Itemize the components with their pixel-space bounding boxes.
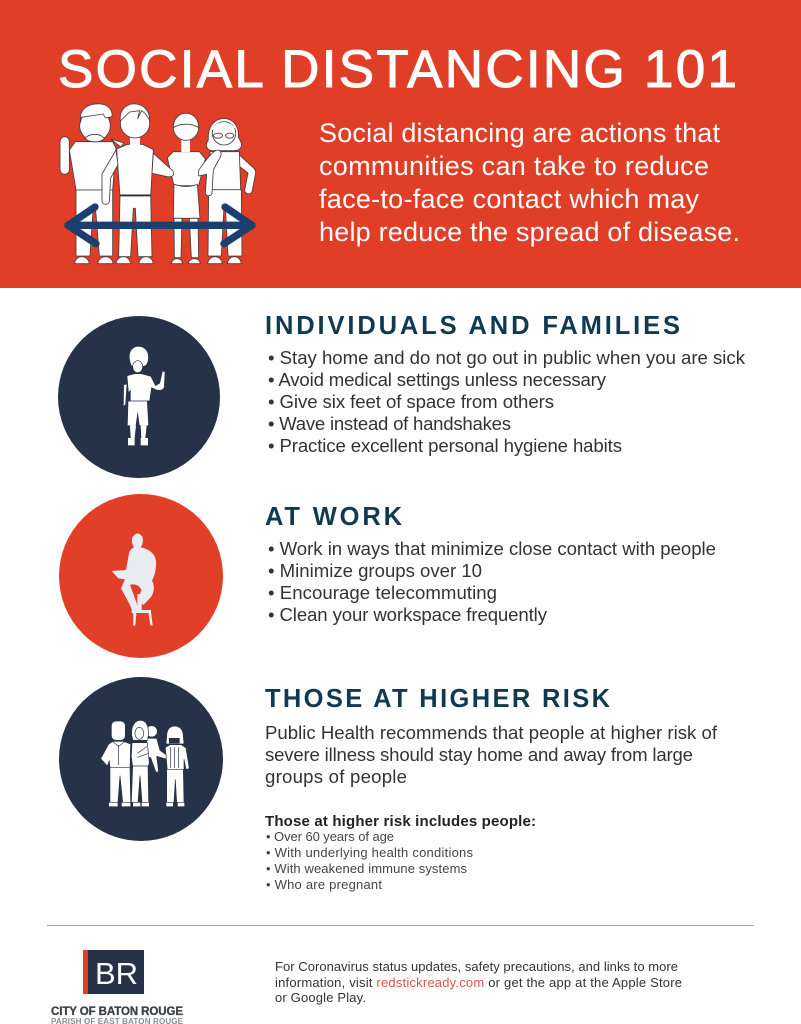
bullet list: • Wave instead of handshakes [268,413,511,434]
icon: person on stool with laptop [59,494,223,658]
bullet list: • Clean your workspace frequently [268,604,548,625]
small bullet list: • With underlying health conditions [266,845,474,860]
person 4 [206,118,256,264]
bullet list: • Give six feet of space from others [268,391,554,412]
intro text: communities can take to reduce [319,151,709,181]
panel: header [0,0,801,288]
intro text: Social distancing are actions that [319,118,720,148]
logo: City of Baton Rouge [51,950,184,1024]
bullet list: • Minimize groups over 10 [268,560,482,581]
illustration: group of people with distance arrow [60,104,256,264]
bullet list [268,347,746,456]
bullet list [268,538,716,625]
small bullet list: • Who are pregnant [266,877,382,892]
person left [101,721,131,807]
heading: AT WORK [265,503,403,531]
mother [131,720,149,807]
intro text: help reduce the spread of disease. [319,217,740,247]
panel: at work [59,494,716,658]
bullet list: • Work in ways that minimize close contact with people [268,538,716,559]
footer note [275,959,682,1005]
person 1 [60,104,124,264]
paragraph: Public Health recommends that people at higher risk of [265,722,718,743]
panel: individuals and families [58,312,746,478]
person 3 [167,113,221,264]
footer note: For Coronavirus status updates, safety precautions, and links to more [275,959,678,974]
heading: INDIVIDUALS AND FAMILIES [265,312,680,340]
small bullet list: • Over 60 years of age [266,829,394,844]
panel: those at higher risk [59,677,718,892]
bullet list: • Practice excellent personal hygiene habits [268,435,622,456]
arrow [68,207,252,244]
logo: City of Baton Rouge: CITY OF BATON ROUGE [51,1006,183,1018]
footer note: information, visit redstickready.com or get the app at the Apple Store [275,975,682,990]
icon: family group [59,677,223,841]
subheading: Those at higher risk includes people: [265,813,536,830]
title: SOCIAL DISTANCING 101 [58,40,737,99]
paragraph [265,722,718,787]
person 2 [102,104,174,264]
heading: THOSE AT HIGHER RISK [265,685,611,713]
bullet list: • Stay home and do not go out in public when you are sick [268,347,746,368]
icon: person waving [58,316,220,478]
bullet list: • Avoid medical settings unless necessary [268,369,607,390]
small bullet list [266,829,474,892]
paragraph: severe illness should stay home and away from large [265,744,693,765]
person right [165,726,189,807]
paragraph: groups of people [265,766,407,787]
child [146,726,167,772]
footer note: or Google Play. [275,990,366,1005]
bullet list: • Encourage telecommuting [268,582,497,603]
intro text: face-to-face contact which may [319,184,700,214]
logo: City of Baton Rouge: BR [95,956,138,991]
small bullet list: • With weakened immune systems [266,861,468,876]
intro text [319,118,740,247]
